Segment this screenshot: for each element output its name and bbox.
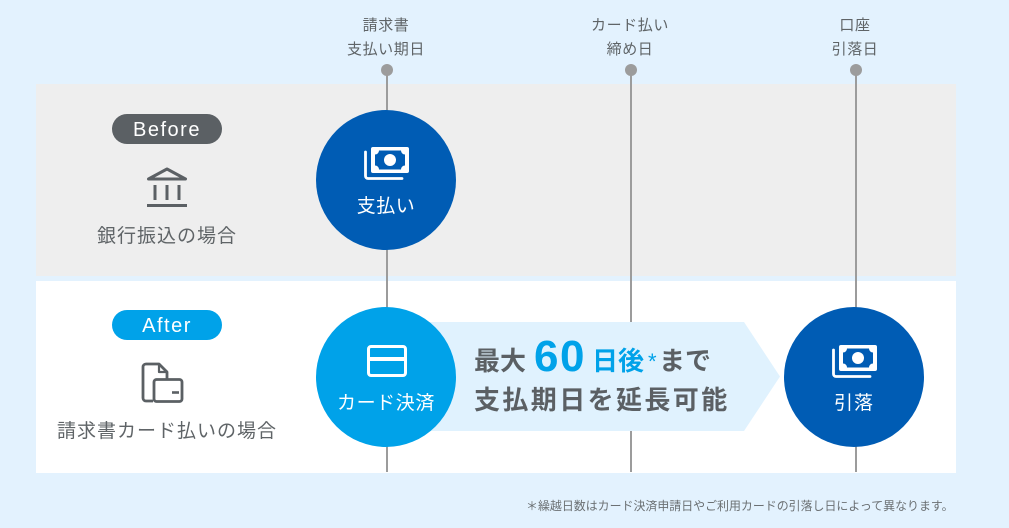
column heading: card closing date: 締め日 bbox=[607, 41, 653, 58]
circle: card payment bbox=[316, 307, 456, 447]
arrow: extension callout bbox=[430, 322, 780, 431]
circle: debit bbox=[784, 307, 924, 447]
column heading: debit date: 引落日 bbox=[832, 41, 878, 58]
label: payment: 支払い bbox=[357, 196, 415, 217]
badge: before bbox=[112, 114, 222, 144]
timeline marker: debit date bbox=[850, 64, 862, 76]
callout line 1: 60 bbox=[534, 332, 586, 381]
callout line 1 bbox=[474, 332, 711, 381]
icon: banknotes bbox=[364, 147, 409, 180]
column heading: invoice due date bbox=[347, 17, 425, 58]
label: debit: 引落 bbox=[834, 393, 874, 414]
row label: bank transfer: 銀行振込の場合 bbox=[97, 226, 237, 247]
timeline marker: card closing date bbox=[625, 64, 637, 76]
row label: invoice card payment: 請求書カード払いの場合 bbox=[57, 421, 277, 442]
callout line 1: * bbox=[648, 349, 657, 374]
footnote: ＊繰越日数はカード決済申請日やご利用カードの引落し日によって異なります。 bbox=[526, 499, 954, 513]
callout line 1: 日後 bbox=[592, 346, 644, 376]
icon: credit card bbox=[367, 345, 407, 377]
icon: bank bbox=[147, 168, 188, 207]
label: card payment: カード決済 bbox=[337, 393, 435, 414]
callout line 1: 最大 bbox=[474, 346, 526, 376]
column heading: invoice due date: 請求書 bbox=[363, 17, 409, 34]
badge: after bbox=[112, 310, 222, 340]
badge: before: Before bbox=[133, 119, 201, 141]
badge: after: After bbox=[142, 315, 192, 337]
panel: before row bbox=[36, 84, 956, 276]
column heading: invoice due date: 支払い期日 bbox=[347, 41, 425, 58]
timeline marker: invoice due date bbox=[381, 64, 393, 76]
icon: banknotes bbox=[832, 345, 877, 378]
column heading: debit date bbox=[832, 17, 878, 58]
column heading: card closing date: カード払い bbox=[591, 17, 669, 34]
timeline line: card closing date bbox=[630, 70, 632, 472]
callout text bbox=[474, 332, 730, 415]
column heading: card closing date bbox=[591, 17, 669, 58]
circle: payment bbox=[316, 110, 456, 250]
callout line 1: まで bbox=[659, 346, 711, 376]
icon: invoice and card bbox=[142, 362, 184, 403]
panel: after row bbox=[36, 281, 956, 473]
callout line 2: 支払期日を延長可能 bbox=[474, 385, 730, 415]
timeline line: invoice due date bbox=[386, 70, 388, 472]
timeline line: debit date bbox=[855, 70, 857, 472]
column heading: debit date: 口座 bbox=[839, 17, 871, 34]
